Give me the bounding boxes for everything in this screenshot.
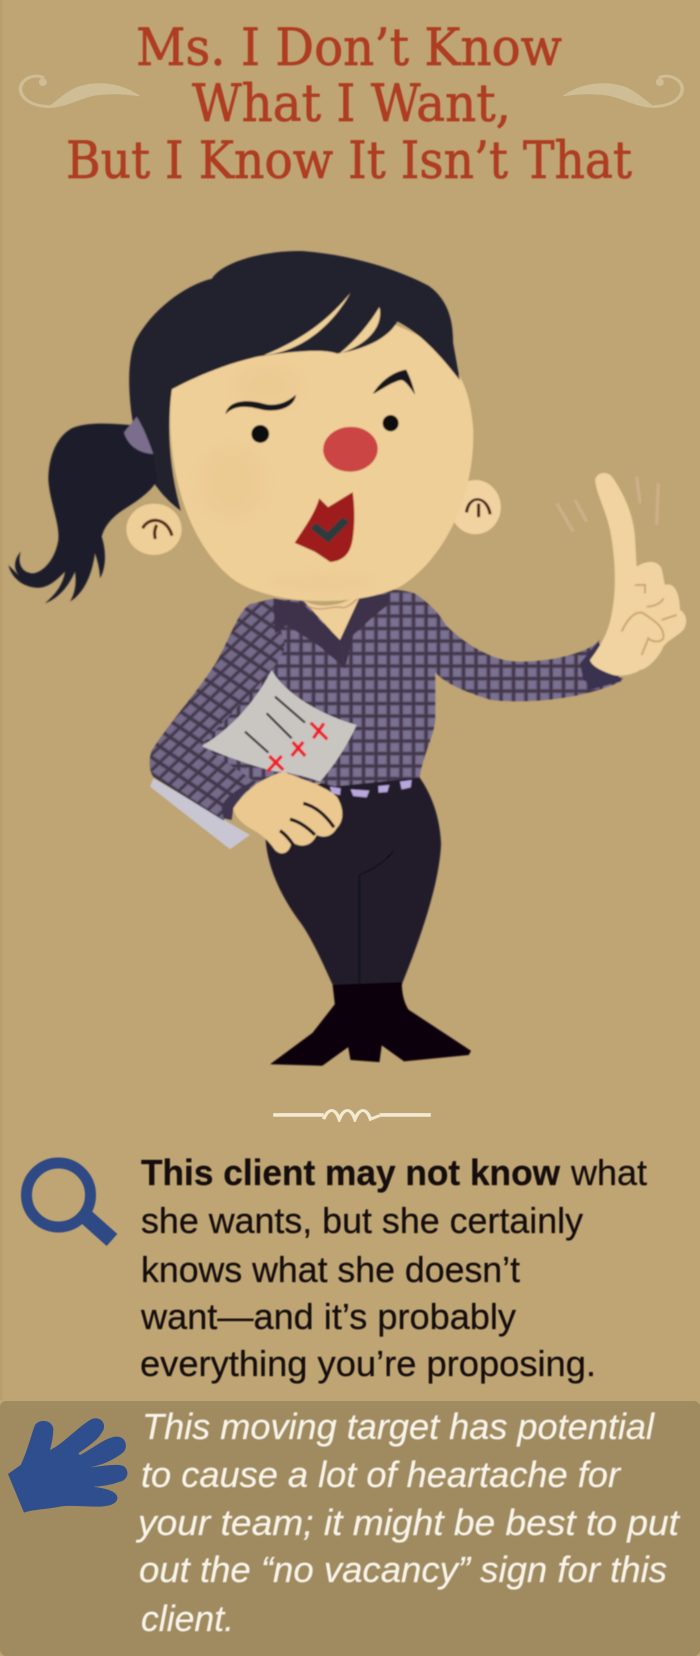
title: But I Know It Isn’t That — [66, 132, 632, 191]
title: Ms. I Don’t Know — [136, 19, 562, 78]
right eyebrow — [373, 370, 415, 395]
text: client description: she wants, but she certainly — [141, 1200, 583, 1241]
hair — [129, 251, 460, 511]
belt — [330, 780, 412, 797]
left title flourish — [20, 76, 141, 108]
hair streak — [263, 293, 350, 355]
tongue — [313, 520, 346, 537]
face — [170, 312, 473, 601]
right title flourish — [562, 76, 682, 108]
hair tie — [124, 417, 153, 454]
text: advice — [135, 1406, 681, 1639]
palm and finger — [590, 473, 686, 676]
left eye — [251, 425, 269, 443]
finger gaps — [280, 803, 334, 845]
text: client description: want—and it’s probably — [140, 1296, 516, 1337]
text: client description — [140, 1152, 647, 1384]
right eye — [383, 415, 399, 431]
face mottling — [196, 361, 375, 593]
left eyebrow — [225, 395, 296, 414]
text: advice: your team; it might be best to put — [135, 1502, 681, 1543]
neck — [304, 592, 363, 642]
text: client description: everything you’re proposing. — [140, 1343, 596, 1384]
hair streak 2 — [339, 307, 380, 354]
divider flourish — [273, 1110, 431, 1119]
boots — [270, 982, 471, 1066]
title: What I Want, — [192, 75, 511, 134]
paper — [202, 670, 357, 782]
icon: stop hand — [8, 1418, 127, 1513]
cuff — [580, 639, 623, 684]
neck folds — [308, 597, 359, 609]
folder — [150, 778, 250, 849]
panel: advice — [0, 1401, 700, 1656]
raised hand — [557, 473, 686, 684]
hand creases — [622, 585, 677, 655]
text: client description: what — [570, 1152, 647, 1193]
text: advice: out the “no vacancy” sign for this — [139, 1549, 667, 1590]
text: client description: This client may not know — [141, 1152, 561, 1193]
mouth — [295, 492, 354, 562]
text: client description: knows what she doesn’t — [141, 1249, 520, 1290]
paper lines — [245, 697, 305, 753]
red crosses — [267, 723, 327, 772]
trousers — [266, 777, 441, 985]
head — [126, 251, 501, 601]
raised arm cuff — [580, 642, 621, 690]
illustration: woman — [8, 251, 686, 1066]
collar right — [340, 593, 390, 668]
icon: magnifying glass — [26, 1163, 112, 1240]
trouser crease — [359, 851, 394, 983]
text: advice: client. — [141, 1598, 234, 1639]
body — [150, 590, 621, 1066]
right ear detail — [467, 499, 490, 517]
sleeve cuff — [222, 779, 258, 820]
shirt — [150, 590, 621, 820]
text: advice: to cause a lot of heartache for — [141, 1454, 622, 1495]
collar left — [273, 598, 345, 668]
nose — [317, 422, 384, 477]
ponytail — [8, 417, 172, 603]
right ear — [450, 480, 501, 534]
motion lines — [557, 477, 658, 532]
left sleeve — [150, 599, 286, 820]
title — [66, 19, 632, 191]
shirt details — [202, 593, 412, 853]
left ear — [126, 504, 182, 555]
left ear detail — [143, 520, 172, 539]
lower hand — [233, 772, 342, 853]
text: advice: This moving target has potential — [142, 1406, 655, 1447]
